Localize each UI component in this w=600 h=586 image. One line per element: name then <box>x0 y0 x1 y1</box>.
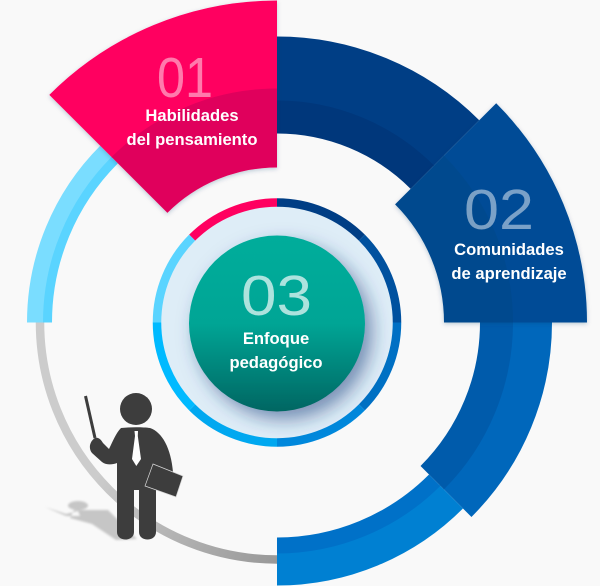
panel: comunidades de aprendizaje <box>419 130 567 322</box>
number 03: 03 <box>241 264 312 328</box>
number 02: 02 <box>464 178 534 242</box>
center segmented ring <box>157 202 397 442</box>
number 01: 01 <box>157 46 213 110</box>
head <box>120 393 152 425</box>
medium blue ring segment <box>432 322 532 503</box>
label: comunidades de aprendizaje: de aprendizaje <box>451 264 567 283</box>
label: habilidades del pensamiento: Habilidades <box>145 106 239 125</box>
gray ring segment <box>40 322 277 560</box>
panel: habilidades del pensamiento <box>81 45 277 185</box>
folder <box>145 464 183 497</box>
bottom blue ring segment <box>277 480 451 569</box>
label: enfoque pedagogico: Enfoque <box>243 329 309 348</box>
light blue ring segment <box>36 152 115 322</box>
panel: enfoque pedagogico <box>189 236 365 412</box>
icon: teacher figure <box>86 393 183 540</box>
center disc <box>159 204 395 440</box>
navy ring segment <box>277 69 456 177</box>
body <box>90 427 173 540</box>
figure shadow <box>45 501 137 540</box>
pointer stick <box>86 396 95 438</box>
label: enfoque pedagogico: pedagógico <box>229 353 323 372</box>
tie <box>132 431 141 466</box>
label: comunidades de aprendizaje: Comunidades <box>454 240 564 259</box>
label: habilidades del pensamiento: del pensamiento <box>127 130 257 149</box>
